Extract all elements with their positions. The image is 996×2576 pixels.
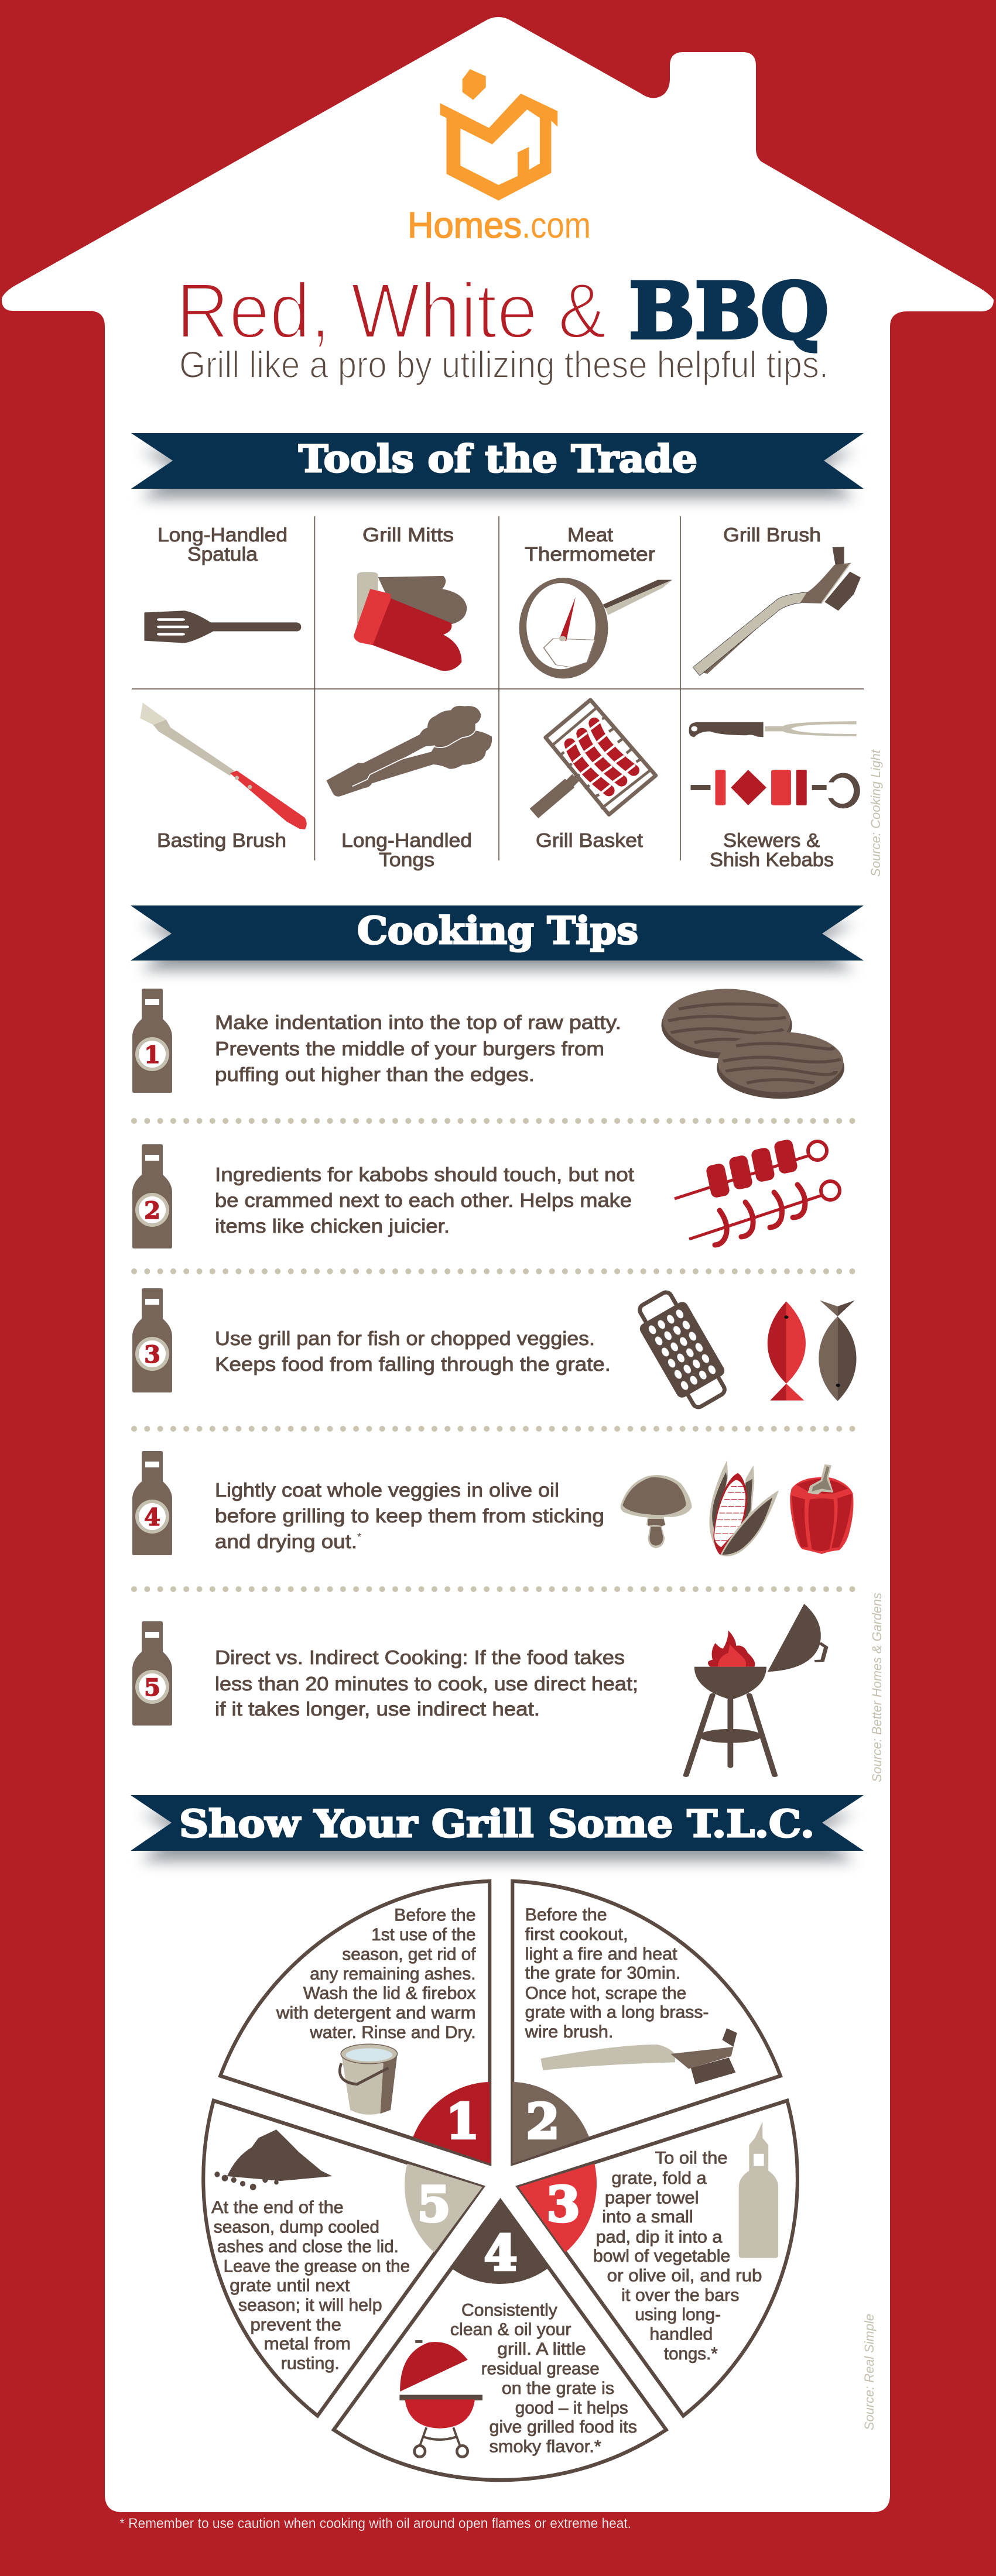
tip 2 text: Ingredients for kabobs should touch, but not: [215, 1164, 634, 1185]
subtitle: Grill like a pro by utilizing these helpful tips.: [179, 344, 829, 386]
tool labels: Thermometer: [525, 543, 655, 565]
segment 4 text: good – it helps: [515, 2398, 628, 2417]
icon: red kettle grill: [399, 2340, 482, 2457]
tip 1 text: [215, 1011, 621, 1085]
tip 2 text: be crammed next to each other. Helps make: [215, 1189, 632, 1211]
segment 3 text: or olive oil, and rub: [607, 2266, 762, 2285]
icon: grill brush: [693, 547, 861, 675]
segment 2 text: Before the: [525, 1905, 607, 1925]
source: Real Simple: Source: Real Simple: [862, 2314, 877, 2430]
icon: corn: [709, 1460, 779, 1556]
tip 2: [132, 1138, 840, 1248]
tool labels: Meat: [567, 524, 613, 546]
tool labels: Basting Brush: [157, 829, 286, 851]
segment 2 text: Once hot, scrape the: [525, 1984, 686, 2003]
icon: bottle 4: 4: [144, 1504, 160, 1531]
tip 4: [132, 1451, 854, 1556]
banner: Show Your Grill Some T.L.C.: [131, 1795, 864, 1861]
logo: Homes.com: Homes: [408, 205, 522, 246]
segment 4 text: clean & oil your: [450, 2320, 571, 2339]
segment 2 text: wire brush.: [525, 2022, 614, 2042]
segment 5 text: grate until next: [230, 2276, 350, 2295]
tool labels: Grill Brush: [723, 524, 821, 546]
icon: basting brush: [140, 702, 307, 829]
tip 4 text: Lightly coat whole veggies in olive oil: [215, 1479, 559, 1501]
tip 5 text: if it takes longer, use indirect heat.: [215, 1698, 540, 1720]
tool labels: [157, 524, 834, 870]
segment 3 text: [593, 2148, 762, 2364]
banner: Tools of the Trade: [131, 433, 864, 499]
icon: bottle 3: [132, 1288, 172, 1392]
tip 4 text: *: [357, 1531, 361, 1543]
tip 2 text: items like chicken juicier.: [215, 1215, 450, 1237]
segment 5 text: season; it will help: [238, 2296, 382, 2315]
segment 5 text: At the end of the: [211, 2198, 344, 2217]
segment 1 text: season, get rid of: [342, 1945, 476, 1964]
segment 4 text: smoky flavor.*: [490, 2437, 601, 2456]
logo: Homes.com: .com: [522, 205, 591, 246]
tip 1: [132, 989, 844, 1099]
segment 2 text: first cookout,: [525, 1925, 628, 1944]
icon: brown fish: [819, 1301, 857, 1401]
segment 5 text: season, dump cooled: [214, 2218, 379, 2237]
segment 5 text: prevent the: [251, 2315, 341, 2334]
icon: bottle 2: 2: [144, 1197, 160, 1224]
segment 5 text: rusting.: [281, 2354, 340, 2373]
tip 3 text: Keeps food from falling through the grate.: [215, 1353, 611, 1375]
wheel numerals: 3: [546, 2177, 580, 2233]
tool labels: Shish Kebabs: [710, 849, 834, 870]
banner: Cooking Tips: Cooking Tips: [357, 909, 638, 953]
icon: kabobs: [675, 1138, 840, 1245]
tip 5 text: [215, 1647, 638, 1720]
wheel numerals: 5: [417, 2177, 451, 2233]
tip 5 text: less than 20 minutes to cook, use direct heat;: [215, 1673, 638, 1695]
segment 3 text: bowl of vegetable: [593, 2246, 730, 2266]
wheel segments: [203, 1881, 798, 2480]
segment 1 text: 1st use of the: [371, 1925, 475, 1944]
segment 4 text: grill. A little: [497, 2340, 586, 2359]
segment 2 text: the grate for 30min.: [525, 1964, 680, 1983]
icon: spatula: [144, 610, 301, 643]
tool labels: Skewers &: [723, 829, 820, 851]
segment 3 text: it over the bars: [621, 2286, 739, 2305]
segment 3 text: To oil the: [655, 2148, 728, 2168]
panel: tools grid: [132, 516, 883, 877]
tool labels: Tongs: [379, 849, 434, 870]
segment 4 text: on the grate is: [502, 2379, 614, 2398]
icon: oil bottle: [739, 2122, 778, 2258]
segment 1 text: water. Rinse and Dry.: [309, 2023, 475, 2042]
icon: grill mitts: [354, 572, 467, 671]
title: BBQ: [629, 266, 829, 356]
segment 5 text: [211, 2198, 410, 2373]
icon: bottle 5: 5: [144, 1674, 160, 1702]
wheel hub wedges: [405, 2082, 597, 2284]
icon: burger patties: [662, 989, 844, 1099]
tip 4 text: [215, 1479, 604, 1552]
segment 1 text: Before the: [394, 1906, 475, 1925]
icon: red fish: [768, 1301, 806, 1401]
logo: Homes.com: [408, 69, 591, 246]
segment 2 text: [525, 1905, 709, 2042]
tool labels: Grill Mitts: [362, 524, 454, 546]
divider dots: [134, 1118, 853, 1124]
icon: bottle 2: [132, 1144, 172, 1248]
segment 5 text: ashes and close the lid.: [217, 2237, 399, 2256]
icon: red pepper: [790, 1464, 854, 1554]
tip 4 text: and drying out.: [215, 1531, 357, 1552]
source: Cooking Light: Source: Cooking Light: [868, 749, 883, 877]
segment 2 text: light a fire and heat: [525, 1944, 677, 1964]
title: Red, White &: [176, 267, 607, 355]
wheel numerals: 1: [446, 2094, 480, 2150]
segment 3 text: tongs.*: [664, 2344, 718, 2364]
segment 3 text: grate, fold a: [611, 2169, 707, 2188]
divider dots: [134, 1268, 853, 1274]
segment 1 text: [276, 1906, 476, 2042]
tool labels: Long-Handled: [341, 829, 472, 851]
icon: shish kebab: [691, 770, 860, 808]
icon: bottle 5: [132, 1621, 172, 1726]
chart: grill care wheel: [203, 1881, 798, 2480]
segment 4 text: residual grease: [481, 2359, 600, 2378]
tip 3 text: Use grill pan for fish or chopped veggies.: [215, 1328, 595, 1349]
tool labels: Spatula: [187, 543, 258, 565]
divider dots: [134, 1426, 853, 1432]
title: [176, 266, 829, 356]
tip 2 text: [215, 1164, 634, 1237]
icon: bottle 1: 1: [144, 1041, 160, 1069]
tip 1 text: Make indentation into the top of raw patty.: [215, 1011, 621, 1033]
segment 5 text: Leave the grease on the: [224, 2257, 410, 2276]
icon: tongs: [326, 706, 492, 797]
icon: grill basket: [530, 700, 656, 818]
tool labels: Long-Handled: [158, 524, 287, 546]
segment 5 text: metal from: [263, 2334, 351, 2354]
segment 3 text: handled: [649, 2324, 713, 2344]
wheel numerals: 4: [484, 2225, 518, 2282]
segment 1 text: with detergent and warm: [276, 2003, 475, 2022]
banner: Tools of the Trade: Tools of the Trade: [299, 437, 697, 481]
divider dots: [134, 1586, 853, 1592]
segment 2 text: grate with a long brass-: [525, 2003, 709, 2022]
segment 3 text: pad, dip it into a: [596, 2227, 723, 2246]
icon: wire brush: [540, 2028, 737, 2084]
segment 1 text: Wash the lid & firebox: [303, 1984, 475, 2003]
wheel numerals: 2: [526, 2094, 560, 2150]
icon: grill pan: [629, 1285, 735, 1414]
tip 1 text: puffing out higher than the edges.: [215, 1064, 535, 1085]
tip 5: [132, 1604, 826, 1775]
icon: bottle 3: 3: [144, 1341, 160, 1368]
segment 3 text: using long-: [635, 2305, 721, 2324]
segment 4 text: give grilled food its: [490, 2417, 637, 2437]
icon: ash pile: [214, 2129, 333, 2190]
tip 3: [132, 1285, 857, 1414]
icon: kettle grill with flames: [686, 1604, 826, 1775]
tip 1 text: Prevents the middle of your burgers from: [215, 1038, 604, 1059]
tip 5 text: Direct vs. Indirect Cooking: If the food takes: [215, 1647, 625, 1668]
banner: Show Your Grill Some T.L.C.: Show Your Grill Some T.L.C.: [179, 1802, 814, 1846]
tip 3 text: [215, 1328, 611, 1375]
icon: bucket: [340, 2044, 398, 2115]
tool labels: Grill Basket: [536, 829, 643, 851]
source: Better Homes & Gardens: Source: Better Homes & Gardens: [870, 1593, 884, 1782]
icon: meat thermometer: [519, 578, 672, 678]
tip 4 text: before grilling to keep them from sticking: [215, 1505, 604, 1527]
footnote: * Remember to use caution when cooking with oil around open flames or extreme heat.: [119, 2516, 631, 2532]
icon: mushroom: [621, 1475, 692, 1548]
segment 1 text: any remaining ashes.: [310, 1964, 475, 1984]
icon: bottle 4: [132, 1451, 172, 1555]
icon: carving fork: [689, 721, 857, 737]
segment 4 text: Consistently: [461, 2301, 557, 2320]
banner: Cooking Tips: [131, 905, 864, 970]
segment 3 text: paper towel: [605, 2188, 699, 2207]
wheel numerals: [417, 2094, 580, 2282]
icon: bottle 1: [132, 989, 172, 1093]
segment 4 text: [450, 2301, 637, 2456]
segment 3 text: into a small: [602, 2207, 693, 2227]
